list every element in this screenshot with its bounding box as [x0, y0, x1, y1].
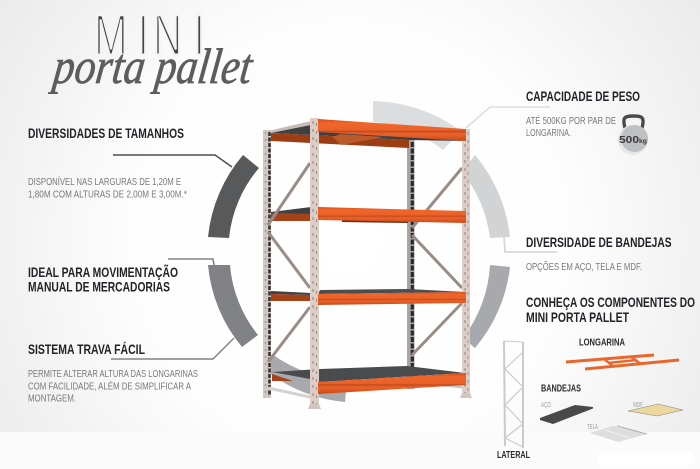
back right post — [407, 140, 414, 389]
connector lines — [111, 107, 557, 359]
text: ideal para movimentacao: MANUAL DE MERCADORIAS — [28, 278, 170, 294]
text: capacidade de peso: LONGARINA. — [526, 128, 571, 139]
front beam: second — [318, 207, 466, 223]
component: longarina: LONGARINA — [579, 336, 625, 348]
tray: mdf: MDF — [633, 402, 643, 409]
second shelf back — [271, 207, 408, 223]
text: capacidade de peso — [526, 88, 640, 139]
connector: capacidade — [466, 107, 550, 128]
front beam: third — [318, 292, 466, 305]
text: sistema trava facil: SISTEMA TRAVA FÁCIL — [28, 341, 145, 357]
connector: bandejas — [504, 237, 557, 252]
connector: tamanhos — [113, 155, 232, 167]
tray: mdf — [628, 402, 683, 416]
bottom shelf — [272, 366, 465, 382]
tray: tela — [587, 424, 647, 442]
arc: mid grey — [208, 265, 258, 347]
title — [48, 3, 256, 94]
title script: porta pallet: porta pallet — [48, 38, 256, 94]
heading: conheca os componentes — [526, 294, 695, 325]
pallet rack — [263, 118, 472, 409]
arc: right light — [462, 155, 510, 238]
text: diversidades de tamanhos: DIVERSIDADES DE TAMANHOS — [28, 125, 184, 141]
icon: 500kg kettlebell: kg — [639, 138, 647, 145]
component: lateral frame: LATERAL — [497, 449, 530, 461]
arc: bottom — [268, 354, 347, 402]
component: longarina — [566, 336, 679, 369]
white patch bottom right — [598, 453, 692, 465]
text: diversidades de tamanhos: DISPONÍVEL NAS LARGURAS DE 1,20M E — [28, 175, 181, 188]
text: capacidade de peso: ATÉ 500KG POR PAR DE — [526, 114, 616, 127]
tray: tela: TELA — [587, 424, 598, 431]
text: diversidade de bandejas — [526, 234, 672, 273]
diagonal braces — [268, 163, 462, 397]
connector: movimentacao — [168, 259, 214, 265]
arc segments ring — [208, 101, 510, 402]
front beam: bottom — [318, 373, 466, 394]
text: ideal para movimentacao: IDEAL PARA MOVIMENTAÇÃO — [28, 263, 178, 280]
top shelf back — [268, 121, 465, 148]
text: sistema trava facil — [28, 341, 198, 404]
text: diversidades de tamanhos — [28, 125, 187, 200]
front left post — [308, 118, 321, 409]
front beam: top — [318, 119, 466, 141]
text: sistema trava facil: MONTAGEM. — [28, 394, 76, 404]
component: bandejas: BANDEJAS — [541, 382, 581, 394]
tray: aco: AÇO — [541, 402, 551, 409]
arc: dark — [208, 155, 259, 238]
tray: aco — [540, 402, 593, 424]
connector: trava — [111, 338, 234, 359]
icon: 500kg kettlebell: 500 — [619, 135, 640, 146]
text: ideal para movimentacao — [28, 263, 178, 294]
third shelf back — [271, 289, 465, 301]
back left post — [263, 130, 271, 398]
arc: lower right — [463, 265, 510, 348]
component: lateral frame — [497, 341, 530, 461]
component: bandejas — [540, 382, 683, 442]
text: diversidades de tamanhos: 1,80M COM ALTURAS DE 2,00M E 3,00M.* — [28, 190, 187, 200]
heading: conheca os componentes: MINI PORTA PALLET — [526, 309, 629, 325]
text: sistema trava facil: PERMITE ALTERAR ALTURA DAS LONGARINAS — [28, 369, 198, 380]
text: sistema trava facil: COM FACILIDADE, ALÉM DE SIMPLIFICAR A — [28, 380, 191, 392]
title word: MINI: MINI — [94, 3, 205, 68]
text: diversidade de bandejas: OPÇÕES EM AÇO, TELA E MDF. — [526, 260, 642, 273]
arc: top light — [373, 101, 461, 150]
text: capacidade de peso: CAPACIDADE DE PESO — [526, 88, 640, 104]
front right post — [460, 129, 472, 398]
icon: 500kg kettlebell — [618, 116, 648, 155]
